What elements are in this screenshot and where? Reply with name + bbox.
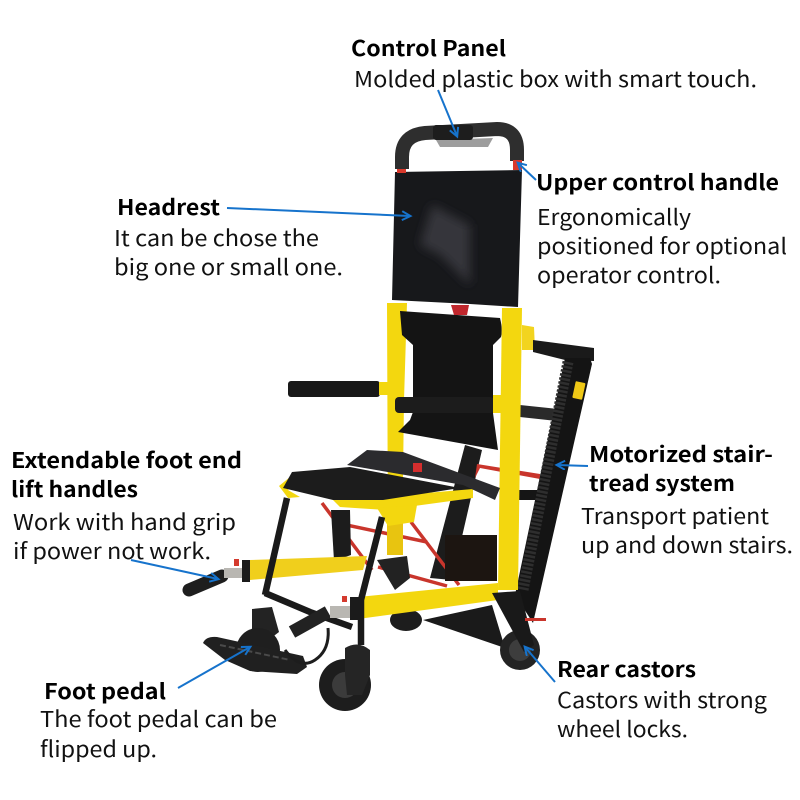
callout: motorized stair-tread system <box>557 438 793 560</box>
callout: rear castors: wheel locks. <box>557 712 688 744</box>
seat belt <box>347 450 500 500</box>
callout: upper control handle: Upper control handle <box>536 166 779 197</box>
callout: extendable foot end lift handles <box>11 444 242 579</box>
callout: control panel <box>351 32 757 136</box>
rear handle and bracket <box>522 325 594 361</box>
rear secondary track <box>430 445 482 580</box>
upper foot-end lift handle <box>189 559 250 590</box>
callout: foot pedal: flipped up. <box>40 732 157 764</box>
callout: extendable foot end lift handles: lift handles <box>11 473 138 504</box>
front caster behind pedal <box>236 607 280 672</box>
front caster wheel <box>319 644 371 711</box>
upper handle bar <box>402 129 517 169</box>
callout: headrest: big one or small one. <box>114 250 343 282</box>
callout: upper control handle: positioned for optional <box>537 229 787 261</box>
lower yellow foot-end bar <box>358 583 498 619</box>
yellow warning label on track <box>572 381 586 400</box>
callout: extendable foot end lift handles: Extendable foot end <box>11 444 242 475</box>
black front legs <box>265 498 382 645</box>
rear wheel behind frame <box>390 609 422 631</box>
center yellow post <box>387 520 403 555</box>
control panel box <box>433 125 493 147</box>
red scissor struts <box>322 503 459 586</box>
pedal linkage <box>285 628 328 663</box>
under-seat bracket <box>377 556 410 590</box>
backrest pad <box>398 311 502 450</box>
red track catch <box>525 618 546 621</box>
footrest pad behind <box>331 510 351 561</box>
callout: upper control handle: operator control. <box>537 258 721 290</box>
red handle collars <box>397 160 522 173</box>
seat frame <box>279 477 473 526</box>
upper yellow foot-end bar <box>250 556 367 580</box>
lower track housing <box>423 605 505 648</box>
inner armrest <box>395 395 503 413</box>
callout: headrest: It can be chose the <box>114 221 319 253</box>
callout: rear castors: Rear castors <box>557 653 696 684</box>
callout: foot pedal <box>40 647 277 764</box>
outer armrest <box>288 381 392 397</box>
motorized stair-tread track <box>515 358 592 623</box>
battery box <box>445 535 497 581</box>
callout: extendable foot end lift handles: if power not work. <box>13 534 211 566</box>
callout: upper control handle <box>518 163 787 290</box>
left upright <box>387 303 407 555</box>
callout: foot pedal: Foot pedal <box>44 675 166 706</box>
rear caster wheel <box>500 630 540 670</box>
callout: motorized stair-tread system: up and down stairs. <box>581 528 793 560</box>
stair chair illustration <box>189 125 594 711</box>
callout: motorized stair-tread system: Motorized stair- <box>589 438 773 469</box>
lower foot-end lift handle <box>292 596 360 632</box>
callout: upper control handle: Ergonomically <box>537 200 692 232</box>
callout: rear castors <box>525 647 768 744</box>
seat cushion <box>283 467 460 500</box>
red release knob <box>451 305 469 315</box>
callout: control panel: Molded plastic box with smart touch. <box>354 62 757 94</box>
callout: motorized stair-tread system: tread system <box>589 467 735 498</box>
callout: extendable foot end lift handles: Work with hand grip <box>13 505 236 537</box>
callout: motorized stair-tread system: Transport patient <box>581 499 769 531</box>
rear bracket plate <box>492 591 534 652</box>
headrest sheen <box>420 205 470 285</box>
foot pedal <box>203 637 307 674</box>
headrest <box>392 170 522 307</box>
cross bars behind track <box>475 405 556 500</box>
callout: rear castors: Castors with strong <box>557 683 768 715</box>
callout: headrest: Headrest <box>117 191 220 222</box>
callout: foot pedal: The foot pedal can be <box>40 702 277 734</box>
callout: control panel: Control Panel <box>351 32 506 63</box>
callout: headrest <box>114 191 410 282</box>
right upright <box>498 308 522 590</box>
